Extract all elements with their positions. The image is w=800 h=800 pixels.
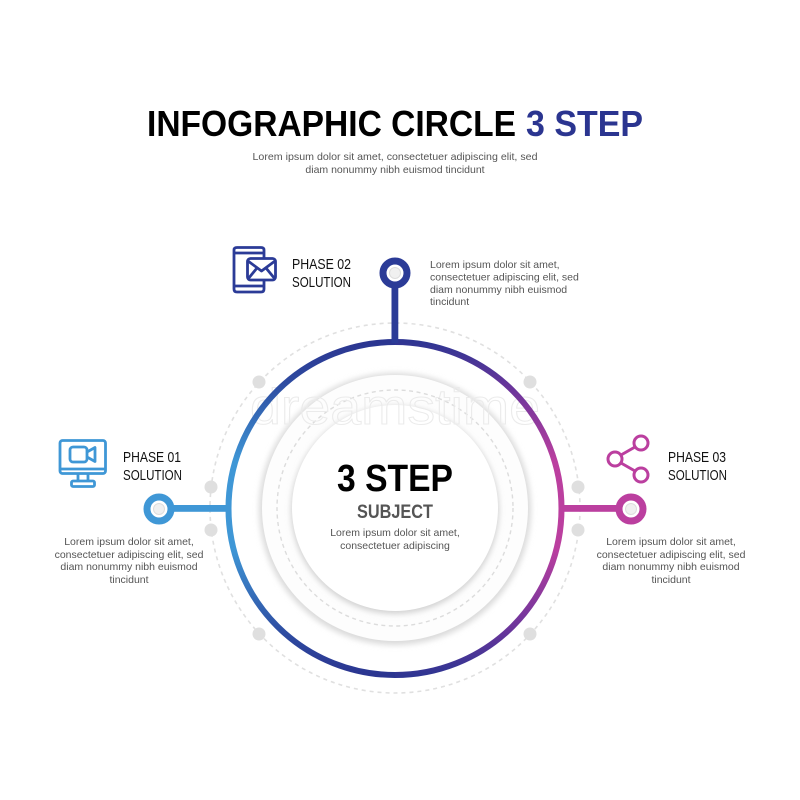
text: phase 01: diam nonummy nibh euismod (60, 561, 198, 573)
label: phase 03: PHASE 03 (668, 449, 726, 466)
grey dots on outer ring (204, 376, 584, 640)
center text: consectetuer adipiscing (340, 540, 450, 552)
text: phase 01: Lorem ipsum dolor sit amet, (64, 536, 194, 548)
center text: 3 STEP (337, 458, 453, 500)
text: phase 03: consectetuer adipiscing elit, sed (597, 549, 746, 561)
icon: monitor with video camera (60, 440, 106, 486)
label: phase 02 (292, 256, 351, 291)
text: phase 03: diam nonummy nibh euismod (602, 561, 740, 573)
center text: Lorem ipsum dolor sit amet, (330, 527, 460, 539)
text: phase 03 (597, 536, 746, 586)
text: phase 02: Lorem ipsum dolor sit amet, (430, 259, 560, 271)
text: phase 01 (55, 536, 204, 586)
text: phase 03: Lorem ipsum dolor sit amet, (606, 536, 736, 548)
label: phase 02: PHASE 02 (292, 256, 351, 273)
center text (330, 458, 460, 552)
title: INFOGRAPHIC CIRCLE (147, 103, 516, 144)
connector: phase 02 (383, 261, 407, 343)
inner dashed ring (277, 390, 513, 626)
connector: phase 03 (561, 497, 643, 521)
label: phase 01 (123, 449, 182, 484)
outer embossed disc (259, 373, 531, 645)
label: phase 01: PHASE 01 (123, 449, 181, 466)
text: phase 02: consectetuer adipiscing elit, sed (430, 272, 579, 284)
inner embossed disc (291, 405, 499, 614)
icon: share nodes (608, 436, 648, 482)
text: phase 03: tincidunt (651, 574, 691, 586)
subtitle (252, 151, 538, 176)
label: phase 03: SOLUTION (668, 467, 727, 484)
label: phase 01: SOLUTION (123, 467, 182, 484)
title: 3 STEP (526, 103, 643, 144)
label: phase 03 (668, 449, 727, 484)
subtitle: diam nonummy nibh euismod tincidunt (305, 164, 485, 176)
main gradient ring (228, 342, 562, 675)
label: phase 02: SOLUTION (292, 274, 351, 291)
outer dashed ring (210, 323, 580, 693)
text: phase 02 (430, 259, 579, 308)
text: phase 01: tincidunt (109, 574, 149, 586)
subtitle: Lorem ipsum dolor sit amet, consectetuer adipiscing elit, sed (252, 151, 538, 163)
text: phase 02: diam nonummy nibh euismod (430, 284, 567, 296)
text: phase 01: consectetuer adipiscing elit, sed (55, 549, 204, 561)
icon: phone with envelope (234, 248, 276, 292)
watermark: dreamstime (250, 379, 540, 435)
text: phase 02: tincidunt (430, 296, 469, 308)
center text: SUBJECT (357, 502, 433, 523)
connector: phase 01 (147, 497, 231, 521)
